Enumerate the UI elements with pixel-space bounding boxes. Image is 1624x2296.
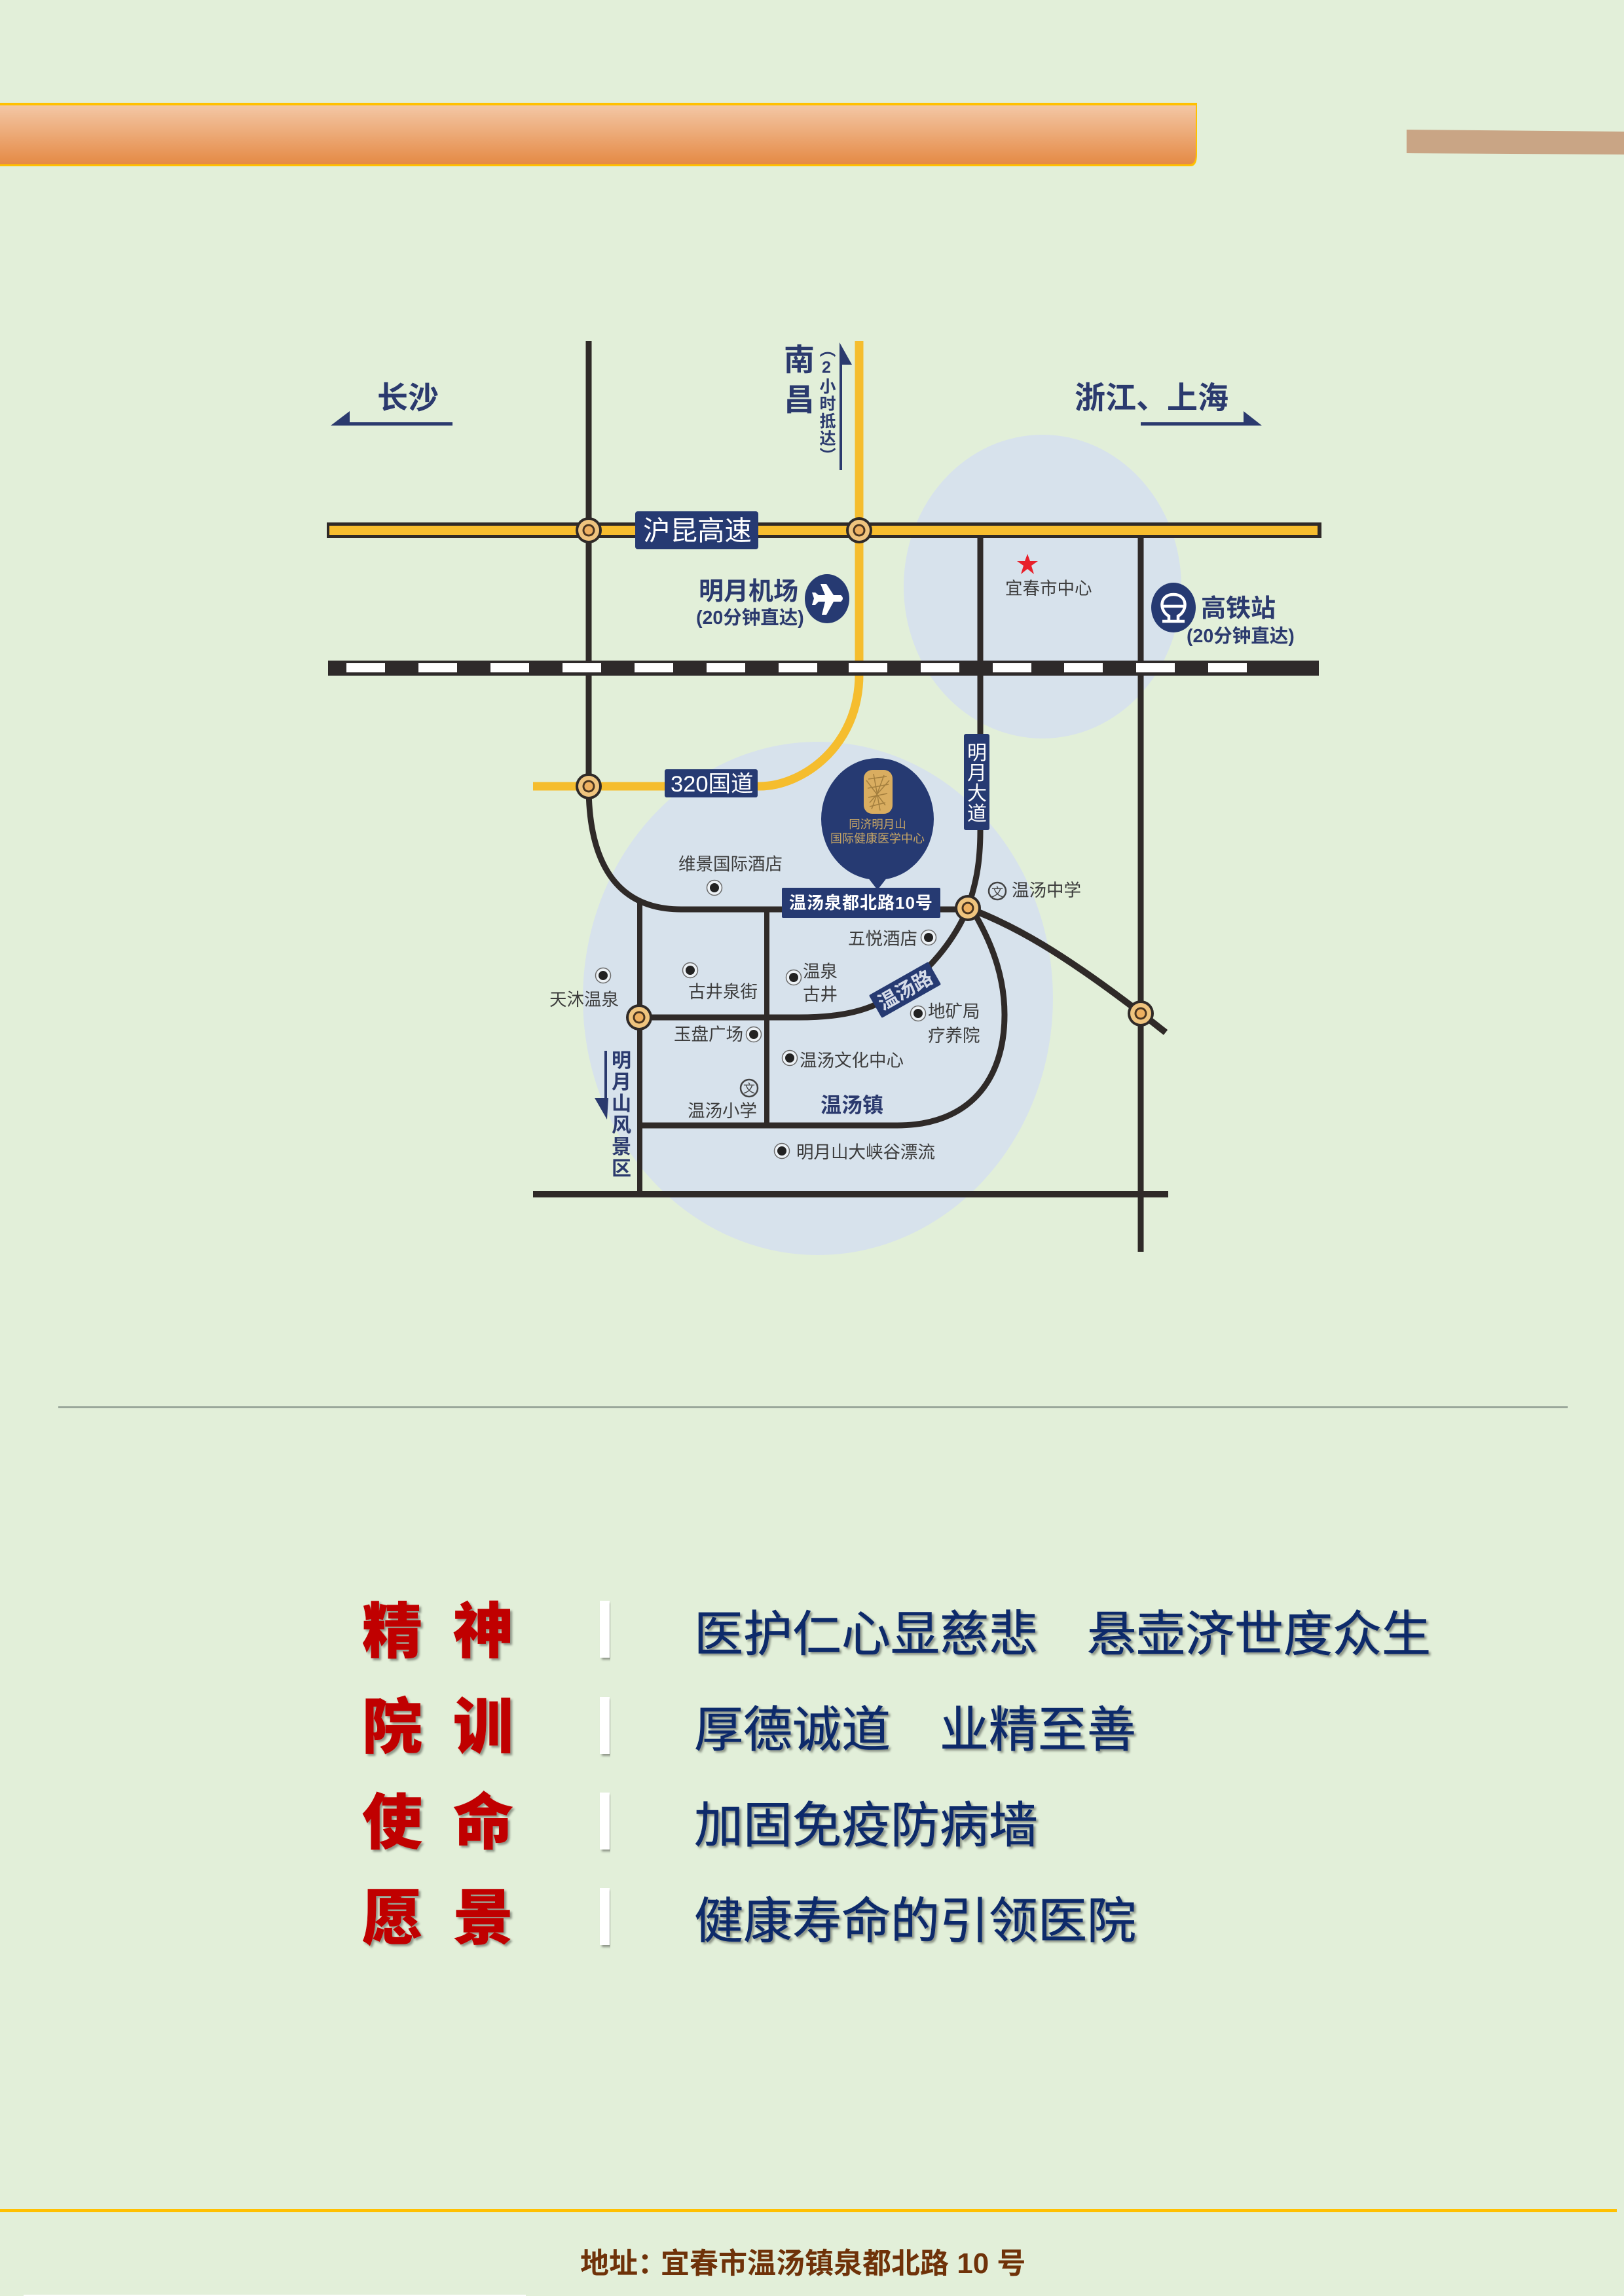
label: hospital address [782,888,940,918]
row: hospital motto: 院训 [362,1694,544,1761]
Hukun expressway [327,522,1321,538]
direction: Nanchang: （2小时抵达） [817,341,836,465]
row: mission: 使命 [362,1790,544,1857]
place: geological bureau sanatorium [910,1002,980,1046]
bottom white edge [24,2295,526,2296]
hospital location pin [821,758,934,889]
direction: Mingyue mountain scenic area: 风 [612,1115,631,1137]
yellow national road 320 and Nanchang road [533,341,859,786]
high speed rail station label and icon: (20分钟直达) [1187,626,1295,647]
footer address: 宜春市温汤镇泉都北路 10 号 [661,2248,1025,2280]
place: Weijing hotel [678,854,783,896]
railway line [328,661,1319,676]
place: Tianmu hot spring [549,968,619,1010]
row: mission [362,1790,1038,1857]
place: Wentang middle school: 温汤中学 [1012,881,1081,900]
row: mission: 加固免疫防病墙 [694,1798,1038,1853]
values list [362,1599,1431,1952]
place: Wentang primary school: 文 [743,1082,755,1095]
row: vision: 健康寿命的引领医院 [694,1893,1136,1948]
direction: Mingyue mountain scenic area: 区 [612,1158,631,1180]
label: National road 320: 320国道 [671,772,754,797]
place: Wentang cultural centre: 温汤文化中心 [800,1051,904,1070]
row: vision [362,1886,1136,1952]
top bar gradient fill [0,105,1196,164]
place: hot spring ancient well: 古井 [803,985,838,1004]
label: Mingyue avenue [964,734,989,830]
row: spirit [362,1599,1431,1666]
row: hospital motto [362,1694,1136,1761]
direction: Mingyue mountain scenic area: 景 [612,1137,631,1158]
direction: Zhejiang Shanghai: 浙江、上海 [1075,380,1228,415]
direction: Nanchang: 南 [784,342,815,377]
direction: Mingyue mountain scenic area: 明 [612,1050,631,1072]
place: Gujing spring street: 古井泉街 [688,982,758,1002]
hot spring town area ellipse [583,742,1053,1255]
label: Mingyue avenue: 月 [967,763,987,784]
row: spirit: 医护仁心显慈悲 悬壶济世度众生 [694,1607,1431,1662]
city centre area ellipse [904,435,1181,738]
direction: Nanchang: 昌 [784,382,815,417]
hospital logo [864,770,893,814]
local black roads [533,341,1168,1252]
hospital location pin: 同济明月山 [849,818,906,831]
direction: Changsha: 长沙 [377,380,439,415]
label: rotated hot spring road: 温汤路 [874,967,936,1015]
footer yellow line [0,2209,1617,2212]
label: Mingyue avenue: 道 [967,803,987,825]
direction: Changsha [331,380,452,426]
place: hot spring ancient well: 温泉 [803,962,838,981]
tan corner block [1407,130,1624,155]
place: Mingyue mountain canyon rafting: 明月山大峡谷漂流 [796,1142,935,1162]
place: geological bureau sanatorium: 疗养院 [928,1026,980,1046]
city centre marker: 宜春市中心 [1005,579,1092,598]
high speed rail station label and icon: 高铁站 [1201,595,1276,623]
high speed rail station label and icon [1151,583,1295,647]
top orange title bar [0,103,1197,166]
direction: Zhejiang Shanghai [1075,380,1262,426]
place: Wentang middle school: 文 [991,886,1003,899]
row: vision: 愿景 [362,1886,544,1952]
place: hot spring ancient well [786,962,838,1004]
row: spirit: 精神 [362,1599,544,1666]
airport label and icon [696,574,849,629]
label: Mingyue avenue: 明 [967,742,987,764]
row: hospital motto: 厚德诚道 业精至善 [694,1702,1136,1757]
location map [327,341,1321,1255]
place: Wenyue hotel: 五悦酒店 [848,929,917,949]
footer address: 地址： [580,2248,667,2280]
hospital location pin: 国际健康医学中心 [830,832,925,845]
direction: Mingyue mountain scenic area [595,1050,631,1180]
direction: Nanchang [784,341,852,470]
place: Wentang town: 温汤镇 [821,1093,883,1117]
place: Wentang primary school: 温汤小学 [688,1101,757,1121]
section divider [58,1406,1568,1408]
label: Hukun expressway: 沪昆高速 [643,515,752,546]
place: Wentang primary school [688,1080,758,1121]
place: Yupan square: 玉盘广场 [674,1025,743,1044]
direction: Mingyue mountain scenic area: 山 [612,1093,631,1115]
airport label and icon: (20分钟直达) [696,608,804,629]
place: geological bureau sanatorium: 地矿局 [928,1002,980,1021]
place: Gujing spring street [682,962,758,1002]
airport label and icon: 明月机场 [699,578,798,606]
label: hospital address: 温汤泉都北路10号 [789,893,933,913]
place: Tianmu hot spring: 天沐温泉 [549,990,619,1010]
label: Mingyue avenue: 大 [967,783,987,805]
road junction nodes [576,517,1154,1030]
place: Weijing hotel: 维景国际酒店 [678,854,783,874]
city centre marker [1005,554,1092,598]
direction: Mingyue mountain scenic area: 月 [612,1072,631,1093]
